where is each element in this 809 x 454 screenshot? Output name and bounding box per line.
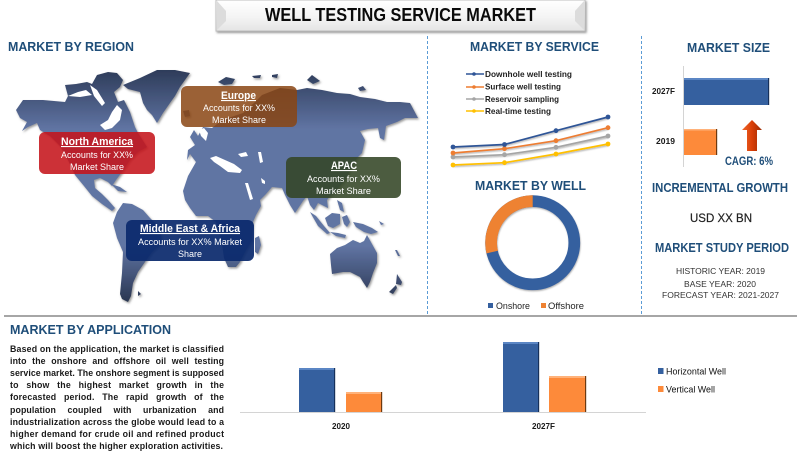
study period details [662,266,779,300]
donut legend [488,301,584,311]
bar chart: market by application: 2027F [532,421,555,431]
legend: market by application: Horizontal Well [666,366,726,376]
application description: into the onshore and offshore oil well testing [10,356,224,366]
callout: Middle East and Africa [126,220,254,261]
study period details: HISTORIC YEAR: 2019 [676,266,765,276]
chart legend: Reservoir sampling [485,94,559,104]
heading: market by service: MARKET BY SERVICE [470,39,599,54]
callout: APAC: APAC [331,160,357,172]
callout: North America: North America [61,136,134,148]
callout: North America: Market Share [70,162,124,172]
study period details: BASE YEAR: 2020 [684,279,756,289]
application description [9,344,224,451]
bar chart: market by application [240,342,646,431]
bar chart: market size: 2019 [656,136,675,146]
chart legend: Real-time testing [485,106,551,116]
callout: Middle East and Africa: Accounts for XX% Market [138,237,242,247]
application description: higher demand for crude oil and refined product [10,429,224,439]
application description: forecasted period. The rapid growth of the [10,392,224,402]
legend: market by application: Vertical Well [666,384,715,394]
bar chart: market by application: 2020 [332,421,350,431]
donut legend: Onshore [496,301,530,311]
legend: market by application [658,366,726,394]
callout: North America [39,132,155,174]
callout: Europe: Accounts for XX% [203,103,275,113]
chart legend: Downhole well testing [485,69,572,79]
value: incremental growth: USD XX BN [690,211,752,225]
heading: market study period: MARKET STUDY PERIOD [655,240,789,255]
callout: Middle East and Africa: Share [178,249,202,259]
application description: to show the highest market growth in the [10,380,224,390]
heading: market by well: MARKET BY WELL [475,178,586,193]
application description: service market. The onshore segment is supposed [10,368,224,378]
heading: market by application: MARKET BY APPLICATION [10,322,171,337]
bar chart: market size [652,66,769,167]
callout: APAC: Market Share [316,186,371,196]
callout: North America: Accounts for XX% [61,150,133,160]
application description: which will boost the higher exploration activities. [9,441,223,451]
world map [16,70,418,302]
bar chart: market size: 2027F [652,86,675,96]
title banner [216,0,585,31]
icon: growth arrow [742,120,762,151]
callout: APAC: Accounts for XX% [307,174,380,184]
application description: industrialization across the globe would lead to a [10,417,224,427]
heading: incremental growth: INCREMENTAL GROWTH [652,180,788,195]
application description: Based on the application, the market is classified [10,344,224,354]
heading: market by region: MARKET BY REGION [8,39,134,54]
chart legend [466,69,572,116]
callout: Europe: Market Share [212,115,266,125]
title banner: WELL TESTING SERVICE MARKET [265,5,536,25]
callout: APAC [286,157,401,198]
application description: population coupled with urbanization and [10,405,224,415]
callout: Europe [181,86,297,127]
donut chart: market by well [488,201,584,311]
study period details: FORECAST YEAR: 2021-2027 [662,290,779,300]
line chart: market by service [451,69,610,167]
donut legend: Offshore [548,301,584,311]
callout: Europe: Europe [221,90,256,102]
CAGR label: CAGR: 6% [725,156,773,168]
callout: Middle East and Africa: Middle East & Africa [140,223,241,235]
chart legend: Surface well testing [485,82,561,92]
heading: market size: MARKET SIZE [687,40,770,55]
